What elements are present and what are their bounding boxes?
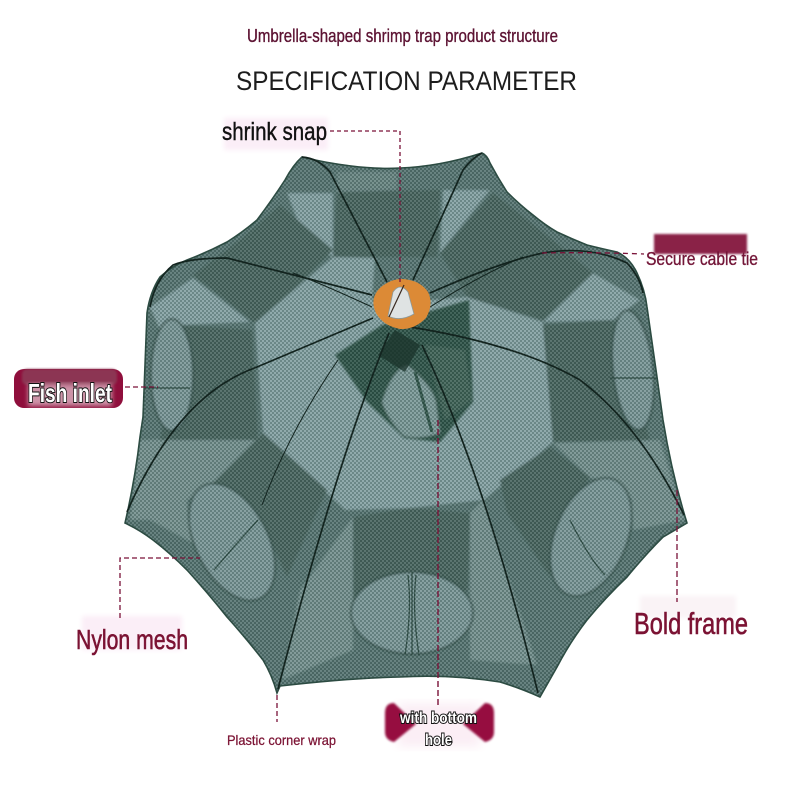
- mesh texture: [110, 140, 700, 710]
- leader line: with bottom hole: [437, 420, 439, 706]
- dark cone panels: [160, 190, 650, 610]
- leader line: shrink snap: [330, 131, 400, 282]
- leader line: fish inlet: [125, 386, 158, 388]
- leader line: bold frame: [676, 490, 678, 602]
- central hanging funnel: [335, 300, 473, 442]
- funnel openings: [151, 308, 659, 654]
- label: secure cable tie: [646, 234, 758, 269]
- label: bold frame: Bold frame: [634, 606, 748, 641]
- label: nylon mesh: [76, 616, 188, 655]
- white hub center: [388, 287, 414, 319]
- label: with bottom hole: hole: [425, 732, 452, 749]
- light mesh panels: [150, 190, 640, 510]
- label: plastic corner wrap: Plastic corner wrap: [227, 732, 336, 748]
- label: fish inlet: Fish inlet: [28, 378, 112, 408]
- label: bold frame: [634, 596, 748, 641]
- label: nylon mesh: Nylon mesh: [76, 624, 188, 655]
- label: shrink snap: shrink snap: [222, 118, 327, 146]
- outer frame edge: [125, 153, 687, 697]
- leader line: plastic corner wrap: [276, 695, 278, 722]
- medium light panels: [130, 172, 685, 680]
- orange hub cap: [373, 279, 431, 329]
- label: fish inlet: [14, 369, 123, 408]
- umbrella shrimp trap photo illustration: [110, 140, 700, 710]
- mesh base: [110, 140, 700, 710]
- label: with bottom hole: [385, 703, 494, 749]
- label: with bottom hole: with bottom: [399, 710, 477, 727]
- title: product structure: Umbrella-shaped shrimp trap product structure: [247, 26, 558, 46]
- leader line: nylon mesh: [120, 558, 200, 618]
- umbrella ribs: [127, 153, 684, 693]
- funnel inner seams: [145, 378, 658, 655]
- label: secure cable tie: Secure cable tie: [646, 249, 758, 269]
- heading: specification parameter: SPECIFICATION PARAMETER: [236, 66, 577, 96]
- leader line: secure cable tie: [542, 253, 644, 254]
